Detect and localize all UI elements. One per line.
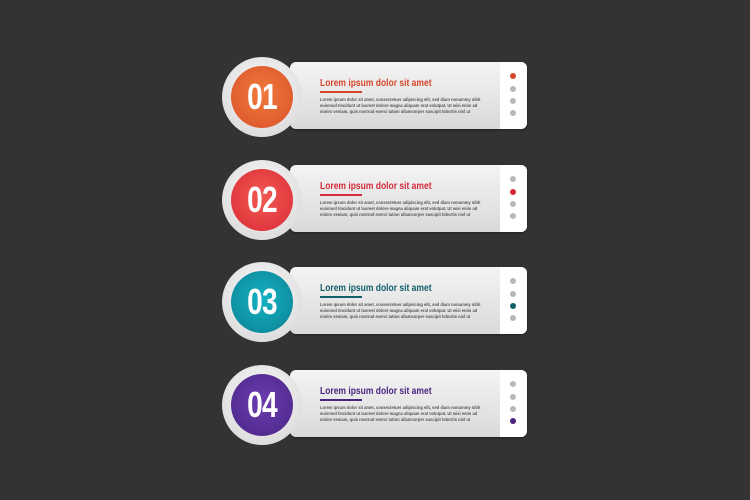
text 01 xyxy=(320,97,480,114)
text 01: euismod tincidunt ut laoreet dolore magna aliquam erat volutpat. Ut wisi enim ad xyxy=(320,103,477,108)
text 03: minim veniam, quis nostrud exerci tation ullamcorper suscipit lobortis nisl ut xyxy=(320,314,470,319)
text 04: Lorem ipsum dolor sit amet, consectetuer adipiscing elit, sed diam nonummy nibh xyxy=(320,405,480,410)
card 04 xyxy=(290,370,527,437)
card 03 xyxy=(290,267,527,334)
row 04 xyxy=(222,365,528,445)
badge 02 xyxy=(222,160,302,240)
text 04 xyxy=(320,405,480,422)
badge 01 xyxy=(222,57,302,137)
text 02: Lorem ipsum dolor sit amet, consectetuer adipiscing elit, sed diam nonummy nibh xyxy=(320,200,480,205)
title 02: Lorem ipsum dolor sit amet xyxy=(320,180,432,192)
text 03: Lorem ipsum dolor sit amet, consectetuer adipiscing elit, sed diam nonummy nibh xyxy=(320,302,480,307)
badge 04: 04 xyxy=(247,384,277,425)
badge 02: 02 xyxy=(247,179,277,220)
title 03: Lorem ipsum dolor sit amet xyxy=(320,282,432,294)
text 01: Lorem ipsum dolor sit amet, consectetuer adipiscing elit, sed diam nonummy nibh xyxy=(320,97,480,102)
text 03: euismod tincidunt ut laoreet dolore magna aliquam erat volutpat. Ut wisi enim ad xyxy=(320,308,477,313)
badge 01: 01 xyxy=(247,76,277,117)
badge 04 xyxy=(222,365,302,445)
row 03 xyxy=(222,262,528,342)
title 04: Lorem ipsum dolor sit amet xyxy=(320,385,432,397)
text 02: euismod tincidunt ut laoreet dolore magna aliquam erat volutpat. Ut wisi enim ad xyxy=(320,206,477,211)
badge 03 xyxy=(222,262,302,342)
row 01 xyxy=(222,57,528,137)
title 01: Lorem ipsum dolor sit amet xyxy=(320,77,432,89)
badge 03: 03 xyxy=(247,281,277,322)
text 02: minim veniam, quis nostrud exerci tation ullamcorper suscipit lobortis nisl ut xyxy=(320,212,470,217)
text 01: minim veniam, quis nostrud exerci tation ullamcorper suscipit lobortis nisl ut xyxy=(320,109,470,114)
text 04: minim veniam, quis nostrud exerci tation ullamcorper suscipit lobortis nisl ut xyxy=(320,417,470,422)
text 04: euismod tincidunt ut laoreet dolore magna aliquam erat volutpat. Ut wisi enim ad xyxy=(320,411,477,416)
text 02 xyxy=(320,200,480,217)
text 03 xyxy=(320,302,480,319)
card 02 xyxy=(290,165,527,232)
row 02 xyxy=(222,160,528,240)
card 01 xyxy=(290,62,527,129)
